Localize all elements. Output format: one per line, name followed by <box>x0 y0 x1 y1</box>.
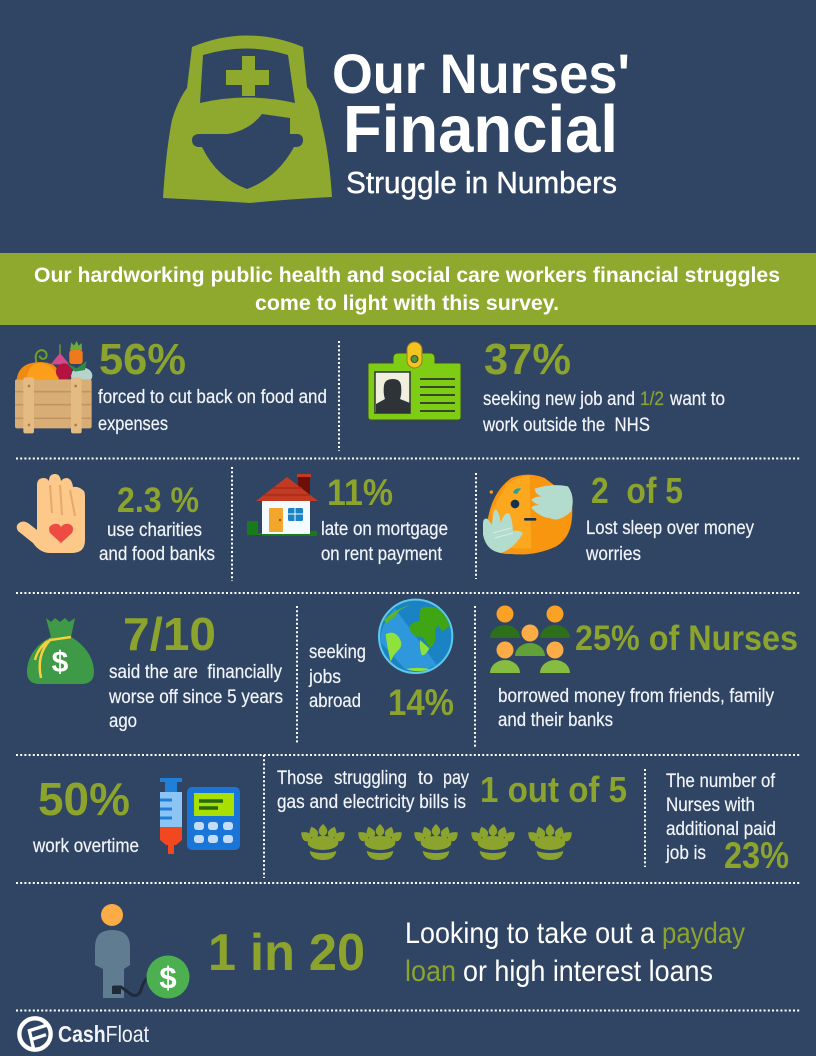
panel: late on mortgage <box>247 472 448 565</box>
text: number of nurses <box>665 771 776 864</box>
text: struggling to pay: pay <box>443 768 469 789</box>
panel: borrowed money <box>490 606 798 731</box>
text: payday loan: payday <box>662 917 745 950</box>
stat: 2.3%: 2.3 % <box>117 481 199 520</box>
panel: financially worse off <box>27 608 283 732</box>
title: Struggle in Numbers <box>346 165 617 200</box>
text: seeking jobs abroad: jobs <box>308 667 341 688</box>
text: number of nurses: Nurses with <box>666 795 755 816</box>
header: title and nurse icon <box>163 36 630 203</box>
text: late on mortgage <box>321 519 448 565</box>
text: worse off: worse off since 5 years <box>108 687 283 708</box>
text: worse off: said the are financially <box>109 662 282 683</box>
text: work overtime: work overtime <box>32 836 139 857</box>
text: number of nurses: additional paid <box>666 819 776 840</box>
text: struggling to pay: struggling <box>334 768 407 789</box>
icon: person chained to debt: $ <box>159 960 177 995</box>
logo wordmark: CashFloat <box>58 1021 150 1047</box>
banner: survey intro: come to light with this survey. <box>255 292 559 315</box>
icon: hand with heart <box>17 474 85 553</box>
panel: lost sleep <box>483 470 754 565</box>
stat: 2 of 5: 2 of 5 <box>591 470 683 511</box>
icon: house <box>247 474 318 536</box>
text: seeking new job: 1/2 <box>640 389 664 410</box>
stat: 56%: 56% <box>99 335 186 384</box>
panel: jobs abroad <box>308 600 454 723</box>
text: struggling to pay: gas and electricity bills is <box>277 792 466 813</box>
stat: 50%: 50% <box>38 773 130 825</box>
text: seeking new job: seeking new job and <box>483 389 635 410</box>
text: seeking new job: work outside the NHS <box>482 415 650 436</box>
icon: money bag: $ <box>52 646 69 679</box>
stat: 11%: 11% <box>327 472 393 513</box>
text: seeking jobs abroad <box>308 642 366 712</box>
stat: 1 out of 5: 1 out of 5 <box>480 769 627 810</box>
text: payday loan: Looking to take out a <box>405 917 655 950</box>
text: borrowed money: borrowed money from friends, family <box>498 686 774 707</box>
text: worse off <box>108 662 283 732</box>
text: forced to cut back: expenses <box>98 414 168 435</box>
text: use charities <box>99 520 215 565</box>
panel: payday loans <box>95 904 745 998</box>
text: struggling to pay: to <box>418 768 433 789</box>
icon: money bag <box>27 618 94 684</box>
title: Financial <box>343 92 618 167</box>
text: forced to cut back <box>98 387 327 435</box>
text: use charities: use charities <box>107 520 202 541</box>
text: payday loan <box>405 917 745 988</box>
icon: people group <box>490 606 570 673</box>
logo: CashFloat <box>19 1018 150 1051</box>
text: seeking new job <box>482 389 725 436</box>
text: use charities: and food banks <box>99 544 215 565</box>
icon: ID badge <box>368 342 461 420</box>
title <box>332 42 630 200</box>
text: seeking jobs abroad: abroad <box>309 691 361 712</box>
banner: survey intro: Our hardworking public health and social care workers financial struggles <box>34 264 780 287</box>
text: seeking jobs abroad: seeking <box>309 642 366 663</box>
text: payday loan: loan <box>405 955 456 988</box>
stat: 1 in 20: 1 in 20 <box>208 924 365 982</box>
text: number of nurses: job is <box>665 843 706 864</box>
icon: calculator <box>187 787 240 850</box>
text: late on mortgage: late on mortgage <box>321 519 448 540</box>
icon: person chained to debt <box>95 904 190 998</box>
panel: additional paid job <box>665 771 789 876</box>
text: lost sleep: worries <box>585 544 641 565</box>
stat: 37%: 37% <box>484 335 571 384</box>
text: borrowed money: and their banks <box>498 710 613 731</box>
text: lost sleep <box>585 518 754 565</box>
banner: survey intro <box>0 253 816 325</box>
text: number of nurses: The number of <box>666 771 776 792</box>
stat: 23%: 23% <box>724 835 789 876</box>
text: worse off: ago <box>109 711 137 732</box>
icon: worried face <box>483 475 573 554</box>
icons: gas burners <box>298 824 575 860</box>
text: borrowed money <box>498 686 774 731</box>
stat: 25% of nurses: 25% of Nurses <box>575 619 798 658</box>
text: late on mortgage: on rent payment <box>321 544 443 565</box>
stat: 7/10: 7/10 <box>123 608 216 660</box>
panel: food cutbacks <box>15 335 327 435</box>
stat: 14%: 14% <box>388 682 454 723</box>
panel: gas and electricity bills <box>277 768 627 860</box>
icon: globe <box>379 600 452 673</box>
icon: nurse <box>163 36 332 203</box>
text: seeking new job: want to <box>669 389 725 410</box>
title: Our Nurses' <box>332 42 630 105</box>
icon: vegetable crate <box>15 341 92 433</box>
text: payday loan: or high interest loans <box>463 955 713 988</box>
panel: overtime <box>32 773 240 857</box>
text: struggling to pay: Those <box>277 768 323 789</box>
text: struggling to pay <box>277 768 469 813</box>
panel: charities and food banks <box>17 474 215 565</box>
icon: syringe <box>160 778 182 854</box>
text: lost sleep: Lost sleep over money <box>586 518 754 539</box>
icon: logo mark <box>19 1018 51 1051</box>
text: forced to cut back: forced to cut back on food and <box>98 387 327 408</box>
panel: seeking new job <box>368 335 725 436</box>
